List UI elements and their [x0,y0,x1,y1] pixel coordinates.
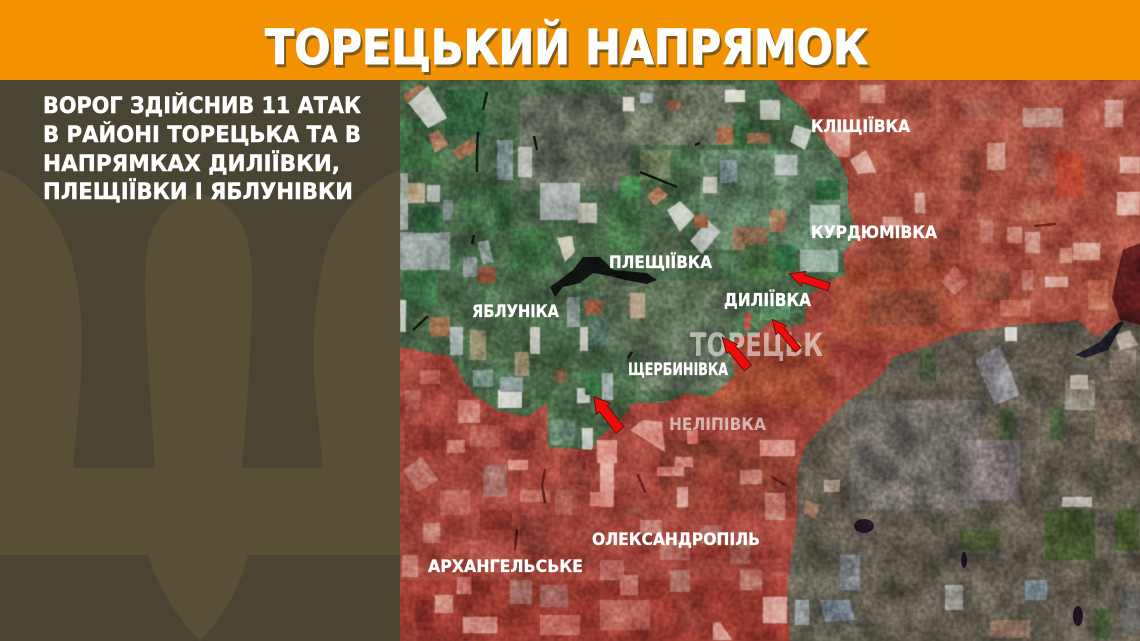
map labels [428,117,937,576]
satellite texture [400,80,1140,641]
map labels: АРХАНГЕЛЬСЬКЕ [428,557,583,576]
red sliver near Toretsk [744,313,751,330]
map [400,80,1140,641]
map labels: ДИЛІЇВКА [724,289,811,311]
green controlled territory [400,80,860,460]
arrow: attack from east towards Kurdiumivka side [787,267,831,294]
title: ТОРЕЦЬКИЙ НАПРЯМОК [265,19,868,76]
map labels: ЯБЛУНІКА [472,302,559,321]
dark ravines [515,224,1055,550]
map labels: ТОРЕЦЬК [690,326,823,364]
ponds [854,519,874,533]
summary text: ВОРОГ ЗДІЙСНИВ 11 АТАК [43,91,362,119]
trident emblem watermark [0,170,400,641]
arrow: attack towards Shcherbynivka [587,391,627,436]
map labels: КУРДЮМІВКА [811,223,937,242]
map labels: ОЛЕКСАНДРОПІЛЬ [592,530,760,549]
header band [0,0,1140,80]
left panel [0,80,400,641]
arrow: attack towards Dyliivka [767,315,803,354]
map labels: ПЛЕЩІЇВКА [609,253,712,272]
red occupied territory base [400,80,1140,641]
grey neutral territory [780,318,1140,641]
summary text: ПЛЕЩІЇВКИ І ЯБЛУНІВКИ [43,177,353,205]
fine grain [400,80,1140,641]
red territory fields [400,80,1140,641]
map labels: ЩЕРБИНІВКА [628,360,728,379]
summary text: В РАЙОНІ ТОРЕЦЬКА ТА В [43,120,361,148]
map labels: КЛІЩІЇВКА [811,117,910,136]
reservoir in occupied territory [1112,243,1140,335]
map labels: НЕЛІПІВКА [669,415,766,434]
summary text: НАПРЯМКАХ ДИЛІЇВКИ, [43,149,340,177]
arrow: attack near Toretsk [717,333,753,372]
reservoir and ponds [550,257,657,297]
summary text [43,91,362,205]
